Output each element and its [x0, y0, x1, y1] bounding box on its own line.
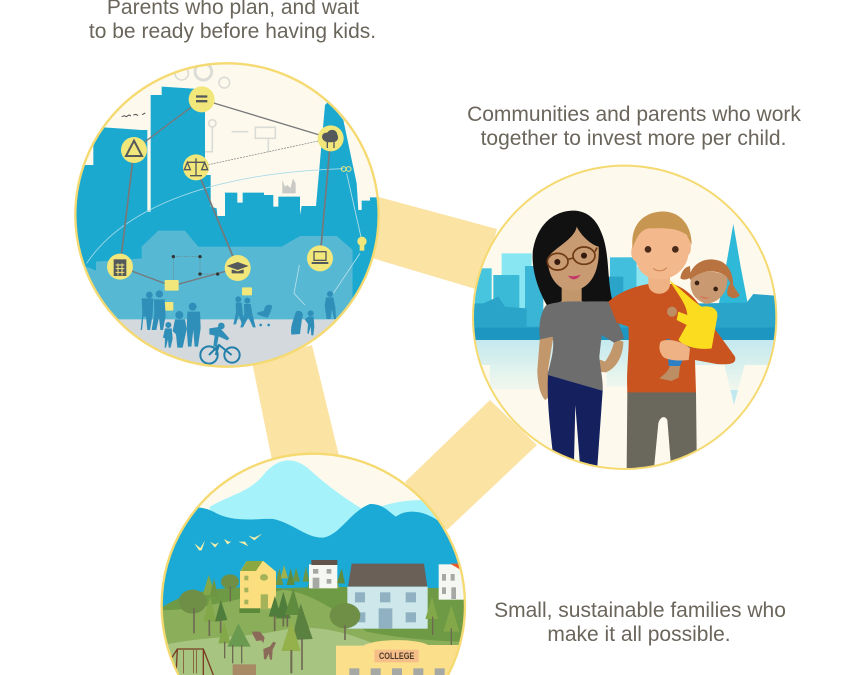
node: graduation cap icon	[225, 255, 251, 281]
family silhouettes	[141, 290, 336, 364]
lighter midground	[73, 231, 353, 320]
near skyline	[474, 276, 776, 328]
meadow	[163, 628, 383, 675]
right house	[439, 564, 467, 600]
man face	[631, 225, 691, 279]
ground	[118, 319, 336, 366]
birds	[122, 113, 145, 117]
speech bubbles	[163, 280, 252, 311]
child top	[669, 280, 717, 349]
child face	[690, 272, 727, 304]
panel: city circle	[70, 63, 383, 373]
child	[659, 259, 740, 381]
hair	[533, 211, 613, 306]
connector: city to parents	[372, 196, 497, 290]
pale mountains	[200, 460, 443, 578]
college building	[336, 640, 463, 675]
jeans	[548, 375, 603, 467]
college sign: COLLEGE	[379, 651, 414, 661]
ring	[162, 454, 465, 675]
far skyline	[475, 224, 748, 329]
water reflection	[470, 340, 780, 405]
large blue house	[347, 564, 428, 629]
lightbulb icon	[357, 237, 367, 251]
faint gears and diagrams	[175, 63, 275, 152]
node: laptop icon	[307, 245, 333, 271]
panel: family circle	[470, 166, 780, 469]
node: equals icon	[189, 86, 215, 112]
caption: be ready: to be ready before having kids.	[89, 20, 376, 43]
ring	[473, 166, 776, 469]
parent and child	[291, 310, 314, 335]
foreground trees	[179, 588, 459, 673]
node: recycle icon	[121, 137, 147, 163]
network arc	[87, 169, 343, 263]
panel: community circle	[157, 454, 470, 675]
caption: make it possible: make it all possible.	[547, 623, 731, 646]
swing set	[171, 649, 213, 675]
birds	[194, 534, 262, 550]
green slope	[157, 590, 470, 675]
woman	[533, 211, 624, 467]
man hand holding child	[659, 340, 690, 361]
link icon	[341, 167, 351, 171]
man hair	[632, 212, 692, 248]
node: scales icon	[183, 154, 209, 180]
bench	[233, 664, 256, 675]
caption: sustainable families: Small, sustainable families who	[494, 599, 786, 622]
yellow house	[239, 561, 276, 613]
glasses	[547, 247, 597, 270]
man neck	[648, 267, 670, 294]
child hair	[689, 259, 733, 288]
shirt	[539, 301, 624, 391]
neck	[562, 288, 582, 302]
mouth	[568, 275, 581, 279]
face	[548, 227, 599, 291]
node: calculator icon	[107, 254, 133, 280]
connector: city to community	[252, 345, 340, 460]
ring	[75, 63, 379, 367]
shirt	[608, 284, 735, 392]
waterfront strip	[470, 328, 780, 340]
child hand	[667, 307, 677, 317]
caption: communities: Communities and parents who work	[467, 103, 801, 126]
blue mountains	[157, 504, 470, 618]
man mouth	[653, 268, 667, 271]
cyclist	[200, 323, 240, 364]
caption: invest: together to invest more per child.	[481, 127, 786, 150]
connector: parents to community	[405, 400, 537, 530]
distant couple	[325, 291, 336, 319]
skyline	[76, 86, 378, 298]
man arm around woman	[553, 340, 554, 348]
deer	[252, 632, 276, 660]
group: parents left	[141, 290, 201, 348]
man	[608, 212, 735, 468]
walkers with stroller	[233, 296, 272, 327]
white house	[309, 560, 337, 588]
background trees	[203, 565, 345, 602]
arms	[537, 337, 623, 400]
legs	[667, 338, 690, 366]
node: trees icon	[318, 125, 344, 151]
network lines	[120, 99, 331, 286]
far hill	[157, 587, 470, 675]
pants	[627, 392, 697, 468]
faint bar chart	[282, 178, 296, 193]
